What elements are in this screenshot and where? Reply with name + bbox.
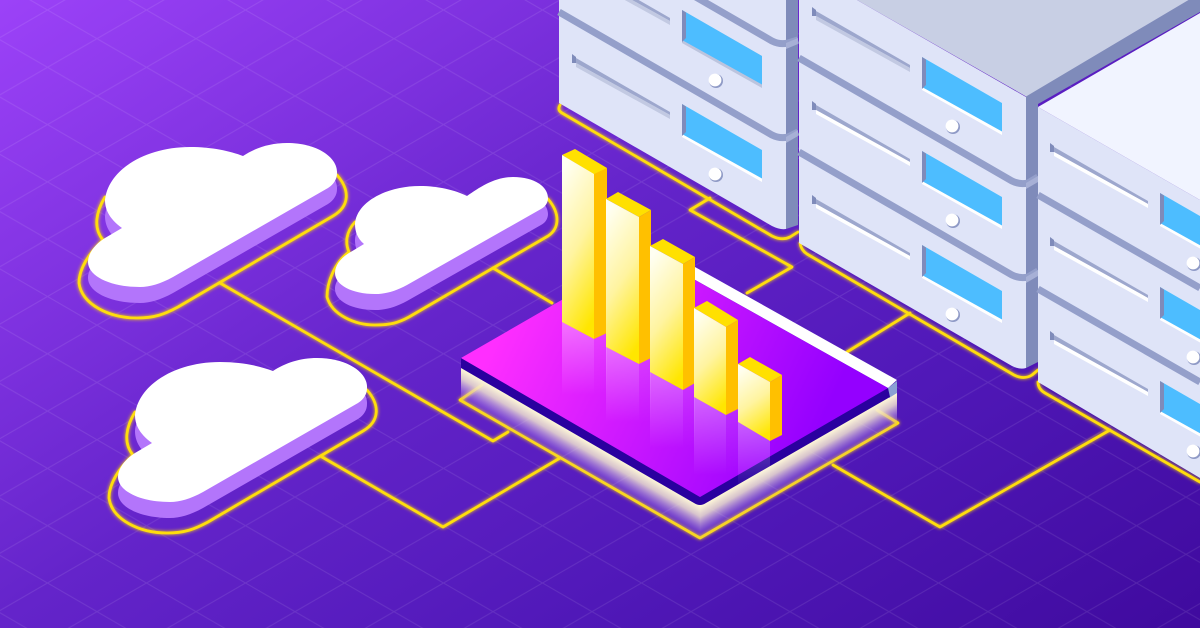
yellow circuit lines bbox=[79, 105, 1200, 538]
server column 2 bbox=[799, 0, 1200, 369]
back edge bbox=[690, 267, 897, 388]
bar 1 bbox=[562, 149, 607, 339]
bar 5 bbox=[738, 357, 782, 441]
platform glow bbox=[461, 366, 700, 548]
cloud: top left bbox=[88, 143, 337, 303]
cloud: bottom left bbox=[118, 358, 367, 518]
platform top bbox=[461, 252, 888, 497]
bar 3 bbox=[650, 239, 695, 390]
bar chart bbox=[562, 149, 782, 441]
server column 3 bbox=[1038, 13, 1200, 478]
bar reflections bbox=[562, 322, 770, 490]
platform edge bbox=[461, 358, 890, 505]
bar 4 bbox=[694, 301, 738, 415]
analytics platform bbox=[461, 252, 897, 548]
bar 2 bbox=[606, 192, 651, 364]
cloud outlines bbox=[79, 175, 346, 318]
server column 1 bbox=[559, 0, 798, 229]
cloud: middle bbox=[335, 177, 548, 310]
